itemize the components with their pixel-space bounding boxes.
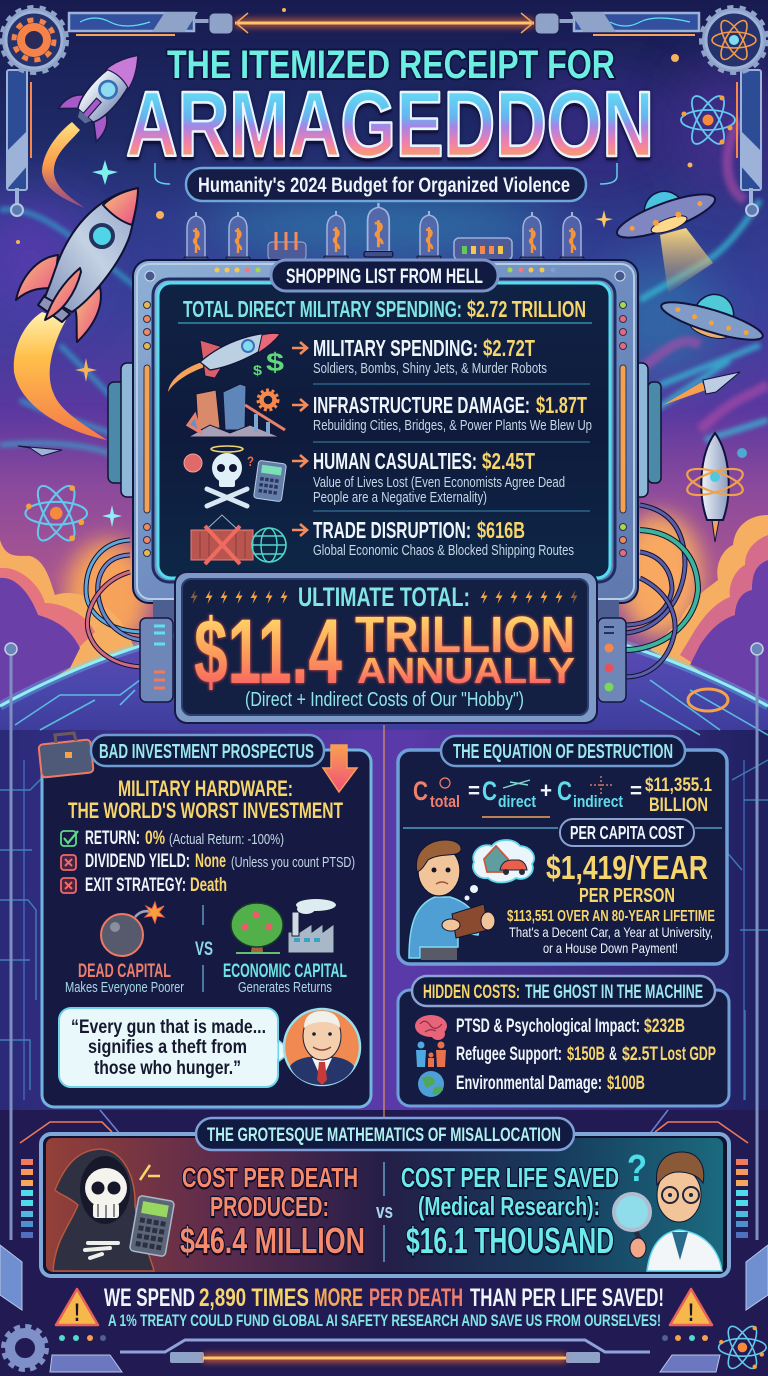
item: military spending: MILITARY SPENDING: <box>313 335 478 361</box>
economic capital label: ECONOMIC CAPITAL <box>223 961 347 982</box>
icon: thought bubble of house and car <box>464 840 534 900</box>
item: trade disruption: TRADE DISRUPTION: <box>313 517 471 543</box>
icon: factory <box>288 899 336 953</box>
row: dividend yield: None <box>195 851 226 872</box>
dead capital label: DEAD CAPITAL <box>78 961 171 982</box>
dead capital label <box>65 961 184 996</box>
equation: = <box>630 778 642 803</box>
row: return <box>61 828 284 849</box>
panel: shopping list from hell <box>108 260 661 603</box>
heading pill <box>196 1118 574 1150</box>
icon: flying saucer with beam <box>609 175 720 293</box>
icon: rocket and dollars <box>168 333 285 392</box>
equation: BILLION <box>649 795 708 816</box>
per capita figures: $1,419/YEAR <box>546 849 708 886</box>
cost per death: PRODUCED: <box>210 1191 329 1222</box>
panel: ultimate total <box>175 572 597 723</box>
equation: C <box>482 776 497 806</box>
item: trade disruption: Global Economic Chaos & Blocked Shipping Routes <box>313 543 574 559</box>
cost per death: COST PER DEATH <box>182 1162 358 1193</box>
icon: ruined city <box>188 384 285 437</box>
warning statement: 2,890 TIMES <box>199 1284 309 1312</box>
heading pill: THE GROTESQUE MATHEMATICS OF MISALLOCATION <box>207 1125 561 1146</box>
vs divider: vs <box>376 1201 393 1223</box>
per capita figures <box>507 849 715 956</box>
row: return: RETURN: <box>85 828 140 849</box>
item: military spending <box>168 333 547 392</box>
icon: small rocket top-left <box>42 39 157 208</box>
equation: C <box>413 776 428 806</box>
item: infrastructure damage: INFRASTRUCTURE DAMAGE: <box>313 392 530 418</box>
arrow <box>292 524 307 536</box>
row: refugee support: & <box>609 1044 617 1065</box>
item: human casualties <box>184 446 565 506</box>
icon: small jet left <box>18 446 62 456</box>
worst investment heading: THE WORLD'S WORST INVESTMENT <box>68 798 343 823</box>
icon: second flying saucer <box>657 280 768 352</box>
icon: falling red arrow <box>323 745 357 792</box>
panel: grotesque mathematics of misallocation <box>41 1118 729 1276</box>
per capita figures: or a House Down Payment! <box>543 940 678 956</box>
footnote: (Direct + Indirect Costs of Our "Hobby") <box>245 689 524 711</box>
icon: rocket and dollars: $ <box>253 362 262 378</box>
subtitle pill: Humanity's 2024 Budget for Organized Violence <box>198 174 570 197</box>
arrow <box>292 455 307 467</box>
icon: warning triangle left: ! <box>74 1299 80 1327</box>
title line one: THE ITEMIZED RECEIPT FOR <box>167 43 615 87</box>
row: return: 0% <box>145 828 165 849</box>
row: environmental damage: $100B <box>607 1073 645 1094</box>
icon: warning triangle right: ! <box>688 1299 694 1327</box>
icon: bomb <box>101 902 164 956</box>
heading pill <box>441 736 685 766</box>
quote speech bubble: signifies a theft from <box>88 1037 247 1058</box>
item: trade disruption: $616B <box>477 517 525 543</box>
item: military spending: Soldiers, Bombs, Shiny Jets, & Murder Robots <box>313 361 547 377</box>
economic capital label <box>223 961 347 996</box>
icon: man with empty wallet <box>409 840 495 960</box>
row: dividend yield: (Unless you count PTSD) <box>231 854 355 871</box>
decorative stars <box>16 8 692 527</box>
heading pill <box>412 976 715 1006</box>
icon: blocked container and globe <box>191 515 286 564</box>
icon: skull, halo, clock and calculator <box>184 446 287 506</box>
equation: total <box>430 792 460 811</box>
row: exit strategy: Death <box>190 875 227 896</box>
icon: grim reaper with calculator <box>53 1149 175 1271</box>
icon: rocket right with orange atom <box>684 433 747 542</box>
equation: C <box>557 776 572 806</box>
row: environmental damage <box>418 1071 645 1097</box>
lightning bolts <box>190 590 578 604</box>
icon: atom top right <box>681 92 735 148</box>
icon: warning triangle right <box>670 1289 712 1327</box>
item: human casualties: HUMAN CASUALTIES: <box>313 448 477 474</box>
equation: = <box>468 778 480 803</box>
panel: bad investment prospectus <box>38 733 371 1107</box>
cost per life saved <box>401 1162 619 1261</box>
cables connecting panels <box>86 505 698 677</box>
heading pill: SHOPPING LIST FROM HELL <box>286 265 483 288</box>
item: trade disruption <box>191 515 574 564</box>
cost per life saved: $16.1 THOUSAND <box>406 1220 614 1261</box>
row: refugee support <box>416 1042 716 1067</box>
total amount: TRILLION <box>355 606 575 663</box>
warning statement: MORE <box>314 1284 363 1312</box>
cost per life saved: COST PER LIFE SAVED <box>401 1162 619 1193</box>
side indicator bars <box>21 1159 748 1238</box>
icon: small jet <box>663 372 740 405</box>
row: ptsd: PTSD & Psychological Impact: <box>456 1016 640 1037</box>
equation <box>413 775 712 817</box>
total direct spending line: TOTAL DIRECT MILITARY SPENDING: <box>183 296 462 322</box>
worst investment heading: MILITARY HARDWARE: <box>118 776 293 801</box>
heading pill: HIDDEN COSTS: <box>423 982 520 1003</box>
row: dividend yield <box>61 851 355 872</box>
row: ptsd: $232B <box>644 1016 685 1037</box>
total amount: $11.4 <box>194 601 342 703</box>
horizon ground <box>0 608 768 730</box>
vs divider: VS <box>195 939 213 960</box>
row: refugee support: Refugee Support: <box>456 1044 562 1065</box>
equation: + <box>540 778 552 803</box>
heading pill <box>271 260 498 291</box>
icon: skull, halo, clock and calculator: ? <box>247 453 254 469</box>
equation: direct <box>498 792 536 811</box>
row: refugee support: Lost GDP <box>660 1044 716 1065</box>
item: human casualties: Value of Lives Lost (Even Economists Agree Dead <box>313 475 565 491</box>
item: human casualties: $2.45T <box>482 448 535 474</box>
row: refugee support: $2.5T <box>622 1044 658 1065</box>
row: exit strategy: EXIT STRATEGY: <box>85 875 186 896</box>
icon: rocket and dollars: $ <box>266 347 285 377</box>
icon: eisenhower portrait <box>284 1009 360 1085</box>
warning statement: PER DEATH <box>369 1284 463 1312</box>
panel: hidden costs <box>398 976 729 1106</box>
item: infrastructure damage: $1.87T <box>536 392 587 418</box>
heading: ULTIMATE TOTAL: <box>298 582 470 612</box>
icon: doctor with magnifying glass: ? <box>627 1148 647 1190</box>
status lights and bars <box>144 268 626 556</box>
cost per death: $46.4 MILLION <box>180 1220 365 1261</box>
row: dividend yield: DIVIDEND YIELD: <box>85 851 190 872</box>
vs divider <box>195 905 213 992</box>
per capita pill <box>560 819 694 846</box>
item: military spending: $2.72T <box>483 335 535 361</box>
side connector modules <box>140 600 626 702</box>
warning statement: WE SPEND <box>104 1284 195 1312</box>
item: infrastructure damage: Rebuilding Cities, Bridges, & Power Plants We Blew Up <box>313 418 592 434</box>
item: human casualties: People are a Negative Externality) <box>313 490 487 506</box>
cost per death <box>180 1162 365 1261</box>
economic capital label: Generates Returns <box>238 980 332 996</box>
right sunset cloud <box>650 515 768 712</box>
bottom frame <box>0 1245 768 1372</box>
per capita pill: PER CAPITA COST <box>570 823 684 843</box>
cost per life saved: (Medical Research): <box>418 1191 600 1221</box>
arrow <box>292 399 307 411</box>
icon: apple tree <box>231 903 283 953</box>
icon: big rocket left <box>14 188 138 440</box>
rocket flame <box>14 312 107 440</box>
equation: $11,355.1 <box>645 775 712 796</box>
bottom frame accents <box>20 1110 748 1143</box>
icon: warning triangle left <box>56 1289 98 1327</box>
heading pill <box>91 735 324 766</box>
vacuum tubes row <box>184 203 584 262</box>
row: ptsd <box>415 1015 685 1040</box>
side rails <box>5 643 763 1240</box>
row: return: (Actual Return: -100%) <box>169 831 284 848</box>
icon: briefcase <box>38 733 94 778</box>
arrow <box>292 342 307 354</box>
heading pill: BAD INVESTMENT PROSPECTUS <box>99 741 314 763</box>
subtitle pill <box>155 163 617 201</box>
quote speech bubble: those who hunger.” <box>94 1058 241 1079</box>
icon: atom left <box>25 481 87 546</box>
vs divider <box>376 1162 393 1262</box>
total direct spending line: $2.72 TRILLION <box>467 296 586 322</box>
row: environmental damage: Environmental Damage: <box>456 1073 602 1094</box>
warning statement: THAN PER LIFE SAVED! <box>470 1284 664 1312</box>
dead capital label: Makes Everyone Poorer <box>65 980 184 996</box>
icon: doctor with magnifying glass <box>614 1148 722 1271</box>
per capita figures: PER PERSON <box>579 885 675 907</box>
warning statement <box>104 1284 664 1330</box>
item: infrastructure damage <box>188 384 592 437</box>
panel: equation of destruction <box>398 736 727 964</box>
top frame <box>2 8 766 216</box>
quote speech bubble <box>59 1008 292 1087</box>
title <box>126 43 654 176</box>
worst investment heading <box>68 776 343 823</box>
left sunset cloud <box>0 540 135 710</box>
total amount <box>194 601 575 703</box>
row: refugee support: $150B <box>567 1044 605 1065</box>
equation: indirect <box>573 792 623 811</box>
per capita figures: That's a Decent Car, a Year at University, <box>509 924 713 940</box>
quote speech bubble: “Every gun that is made... <box>71 1017 266 1038</box>
total amount: ANNUALLY <box>357 650 575 691</box>
